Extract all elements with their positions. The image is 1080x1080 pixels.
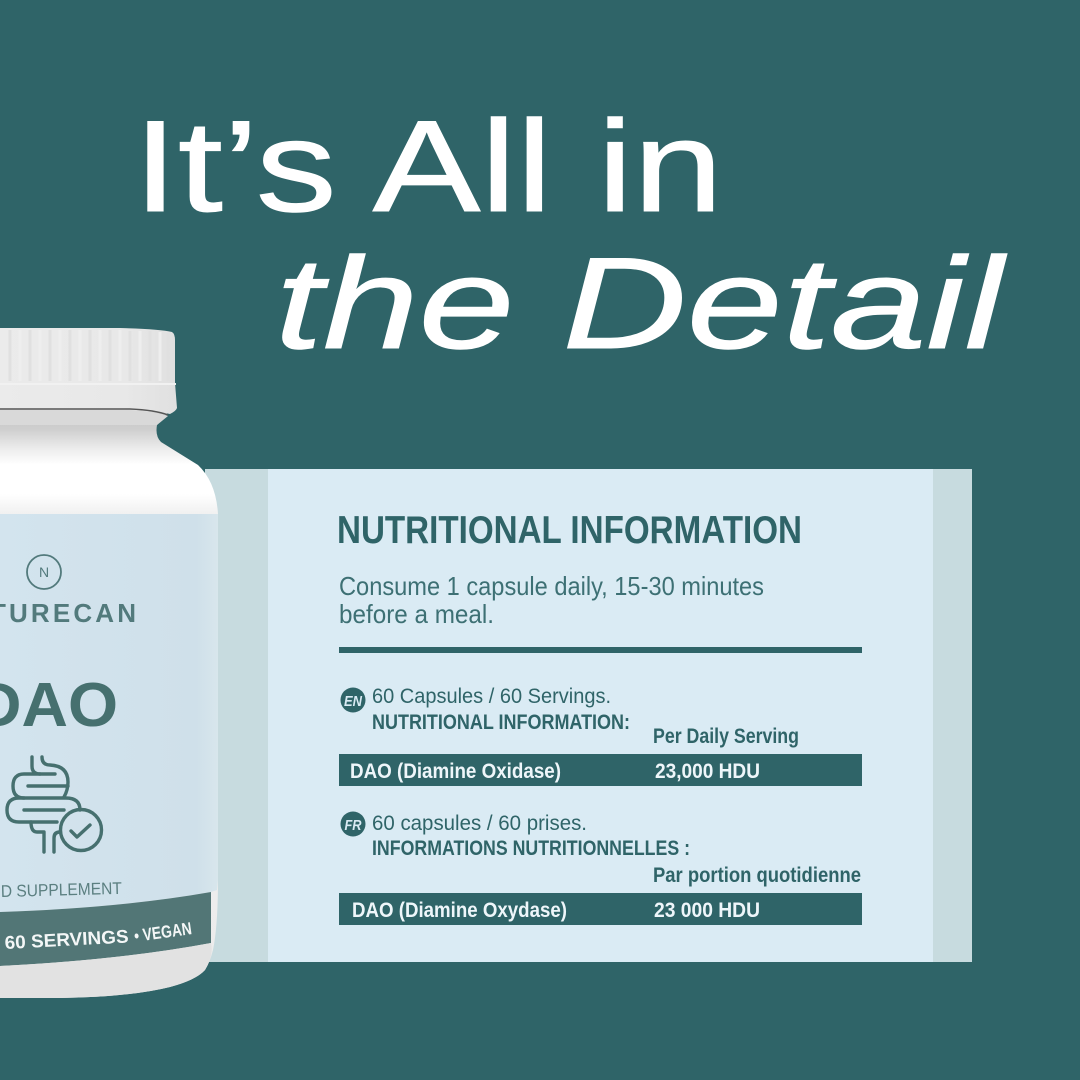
bottle band: [0, 892, 211, 966]
panel: nutritional information label: [205, 469, 972, 962]
title: [133, 93, 1007, 376]
section: English nutrition facts: EN: [344, 693, 363, 710]
section: French nutrition facts: DAO (Diamine Oxydase): [352, 898, 567, 922]
bottle cap: [0, 328, 177, 425]
section: French nutrition facts: FR: [344, 817, 362, 834]
section: English nutrition facts: Per Daily Serving: [653, 724, 799, 748]
section: English nutrition facts: 60 Capsules / 60 Servings.: [372, 684, 611, 708]
text: food supplement: D SUPPLEMENT: [1, 879, 122, 901]
logo: N circle: N: [39, 564, 49, 580]
title: It’s All in: [133, 93, 723, 239]
heading: nutritional information: NUTRITIONAL INFORMATION: [337, 509, 802, 552]
text: 60 servings: 60 SERVINGS: [4, 926, 129, 953]
text: vegan: • VEGAN: [133, 918, 193, 946]
title: the Detail: [275, 230, 1007, 376]
section: English nutrition facts: 23,000 HDU: [655, 759, 760, 783]
section: English nutrition facts: DAO (Diamine Oxidase): [350, 759, 561, 783]
logo: N circle: [27, 555, 61, 589]
icon: intestine with check: [7, 757, 102, 852]
section: English nutrition facts: [339, 684, 862, 786]
section: English nutrition facts: NUTRITIONAL INFORMATION:: [372, 710, 630, 734]
text: directions: Consume 1 capsule daily, 15-30 minutes: [339, 571, 764, 601]
section: French nutrition facts: 23 000 HDU: [654, 898, 760, 922]
section: French nutrition facts: Par portion quotidienne: [653, 863, 861, 887]
section: French nutrition facts: 60 capsules / 60 prises.: [372, 811, 587, 835]
text: directions: [339, 571, 764, 629]
section: French nutrition facts: INFORMATIONS NUTRITIONNELLES :: [372, 836, 690, 860]
text: directions: before a meal.: [339, 599, 494, 629]
section: French nutrition facts: [339, 811, 862, 925]
bottle label: [0, 514, 218, 912]
supplement bottle: [0, 328, 218, 998]
